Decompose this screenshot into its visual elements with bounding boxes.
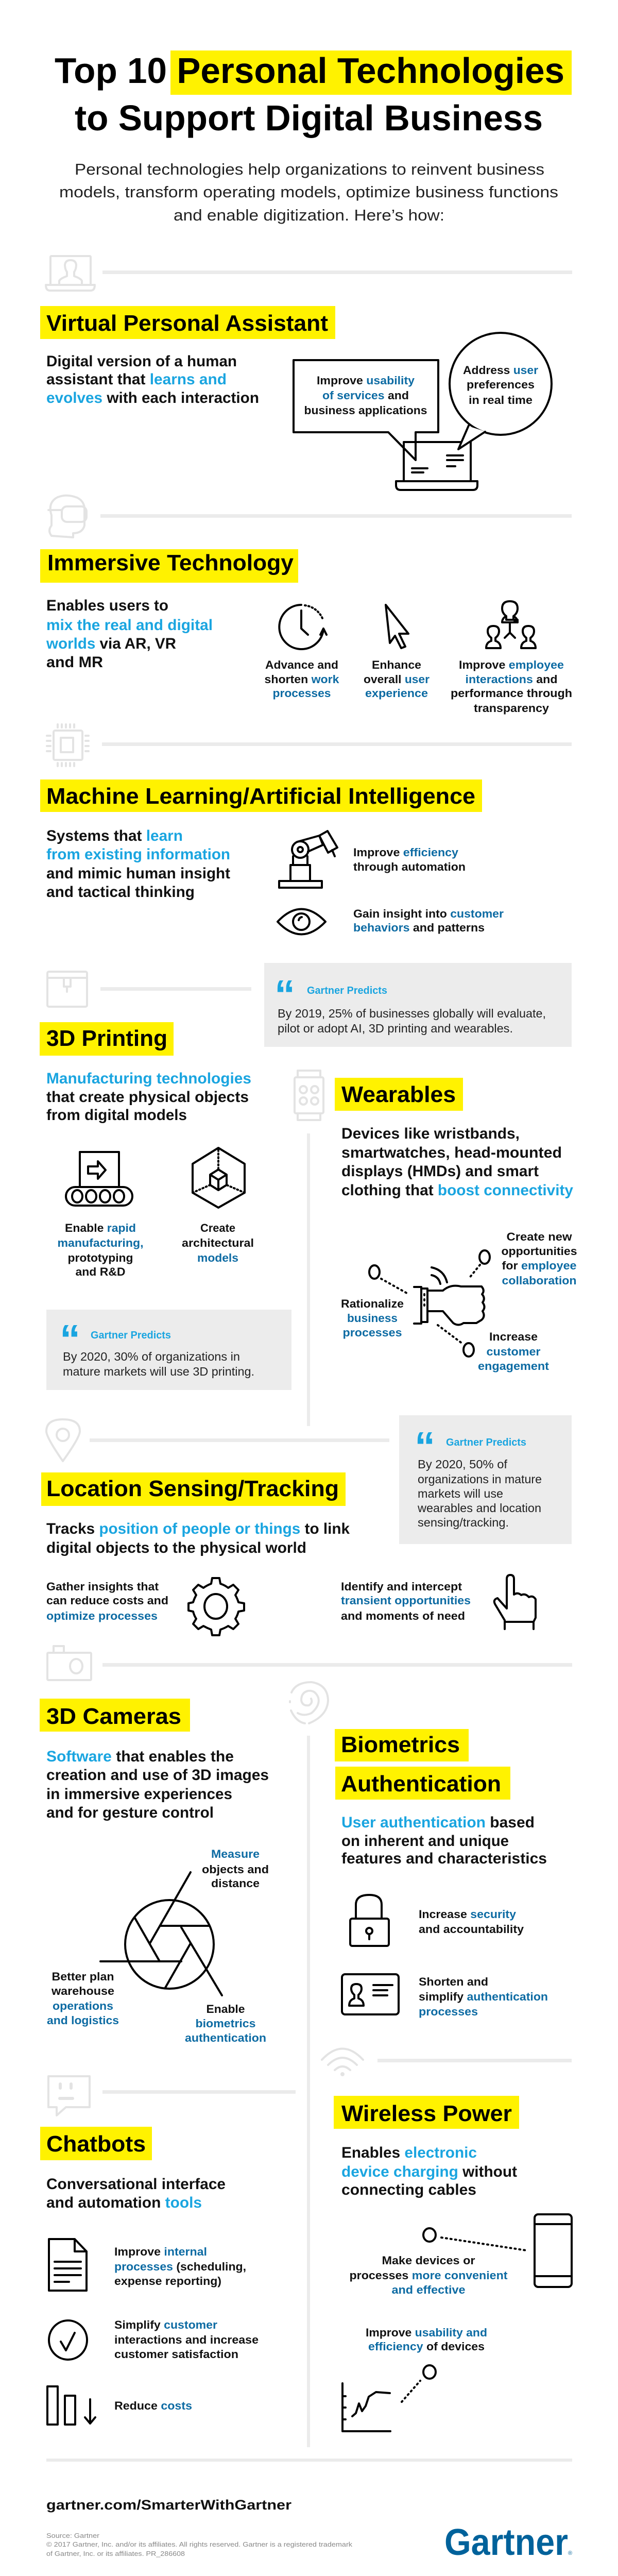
caption: user experience: Enhance xyxy=(372,658,421,671)
text: identify and intercept: and moments of need xyxy=(341,1609,465,1622)
callout: user preferences: in real time xyxy=(469,394,533,406)
caption: enable biometrics: Enable xyxy=(206,2003,245,2015)
callout: usability: Improve usability xyxy=(317,374,415,387)
caption: convenient: processes more convenient xyxy=(349,2269,508,2282)
caption: employee interactions: transparency xyxy=(474,702,550,715)
caption: customer engagement: Increase xyxy=(489,1330,538,1343)
heading: VPA: Virtual Personal Assistant xyxy=(46,311,328,336)
panel: biometrics xyxy=(335,1729,548,2018)
text: 3D cameras description: and for gesture control xyxy=(46,1804,214,1821)
text: immersive description xyxy=(46,597,213,671)
caption: employee collaboration: for employee xyxy=(502,1259,577,1272)
icon: camera xyxy=(47,1646,91,1680)
text: biometrics description: User authentication based xyxy=(341,1814,535,1831)
text: location description: Tracks position of people or things to link xyxy=(46,1520,350,1537)
heading: chatbots: Chatbots xyxy=(46,2131,146,2157)
caption: architectural models: models xyxy=(197,1251,238,1264)
text: gather insights: can reduce costs and xyxy=(46,1594,168,1607)
caption: measure objects xyxy=(202,1848,269,1890)
callout: gartner predicts 2019: “ xyxy=(274,972,295,1018)
caption: enable biometrics xyxy=(185,2003,266,2044)
text: 3D cameras description: creation and use of 3D images xyxy=(46,1767,269,1784)
caption: work processes: shorten work xyxy=(265,673,339,686)
caption: employee collaboration xyxy=(502,1230,577,1287)
caption: rapid manufacturing xyxy=(58,1222,143,1278)
caption: warehouse: warehouse xyxy=(51,1985,114,1997)
icon: cursor xyxy=(386,605,408,648)
caption: convenient: Make devices or xyxy=(382,2254,475,2267)
panel: machine learning xyxy=(40,779,504,935)
callout: gartner predicts 3D printing: mature markets will use 3D printing. xyxy=(63,1365,254,1378)
heading: ML/AI: Machine Learning/Artificial Intelligence xyxy=(46,784,475,809)
text: immersive description: worlds via AR, VR xyxy=(46,635,176,652)
icon: check circle xyxy=(49,2320,87,2360)
text: 3D printing description: Manufacturing technologies xyxy=(46,1070,251,1087)
icon: eye xyxy=(278,909,325,935)
title: Top 10 Personal Technologies xyxy=(55,50,564,91)
caption: usability xyxy=(366,2326,487,2353)
text: wireless description: device charging without xyxy=(341,2163,517,2180)
callout: gartner predicts 50%: sensing/tracking. xyxy=(418,1516,509,1529)
text: chatbots description xyxy=(46,2176,226,2211)
text: wearables description: clothing that boost connectivity xyxy=(341,1182,573,1199)
text: wearables description xyxy=(341,1125,573,1199)
text: ML description: and mimic human insight xyxy=(46,865,230,882)
callout: gartner predicts 50%: organizations in mature xyxy=(418,1472,542,1486)
heading: wearables: Wearables xyxy=(341,1082,456,1107)
heading: chatbots xyxy=(40,2127,152,2160)
text: chatbots description: Conversational interface xyxy=(46,2176,226,2193)
text: customer satisfaction: interactions and increase xyxy=(114,2333,259,2346)
text: internal processes xyxy=(114,2245,246,2287)
text: biometrics description xyxy=(341,1814,547,1867)
icon: laptop xyxy=(396,442,477,490)
caption: measure objects: distance xyxy=(211,1877,260,1890)
caption: measure objects: Measure xyxy=(211,1848,260,1860)
caption: architectural models: architectural xyxy=(182,1236,254,1249)
panel: location sensing xyxy=(41,1472,536,1635)
text: immersive description: mix the real and digital xyxy=(46,617,213,634)
caption: work processes xyxy=(265,658,339,700)
caption: user experience: overall user xyxy=(364,673,430,686)
text: customer behaviors xyxy=(353,907,504,934)
icon: location pin xyxy=(46,1419,80,1461)
heading: immersive: Immersive Technology xyxy=(47,550,294,575)
title xyxy=(55,50,572,138)
caption: rapid manufacturing: and R&D xyxy=(75,1265,126,1278)
logo: Gartner: Gartner xyxy=(444,2522,568,2563)
footer: source: © 2017 Gartner, Inc. and/or its affiliates. All rights reserved. Gartner is a registered trademark xyxy=(46,2540,353,2548)
heading: 3D printing xyxy=(40,1022,174,1056)
text: security: and accountability xyxy=(419,1923,524,1936)
heading: location: Location Sensing/Tracking xyxy=(46,1476,339,1501)
callout: usability: business applications xyxy=(304,404,427,417)
heading: biometrics xyxy=(335,1729,510,1800)
text: wireless description xyxy=(341,2144,517,2198)
text: security: Increase security xyxy=(419,1908,517,1921)
text: gather insights: optimize processes xyxy=(46,1609,158,1622)
caption: employee collaboration: collaboration xyxy=(502,1274,577,1287)
caption: work processes: processes xyxy=(273,687,331,700)
text: immersive description: Enables users to xyxy=(46,597,168,614)
text: efficiency xyxy=(353,846,466,873)
text: internal processes: expense reporting) xyxy=(114,2275,221,2287)
heading: 3D printing: 3D Printing xyxy=(46,1026,167,1051)
panel: 3D cameras xyxy=(40,1699,269,2044)
caption: rationalize: processes xyxy=(343,1326,402,1339)
caption: usability: efficiency of devices xyxy=(368,2340,485,2353)
callout: user preferences xyxy=(450,333,552,449)
caption: employee interactions: Improve employee xyxy=(459,658,564,671)
text: customer behaviors: behaviors and patterns xyxy=(353,921,485,934)
text: customer satisfaction: customer satisfaction xyxy=(114,2348,238,2361)
text: authentication processes: Shorten and xyxy=(419,1975,488,1988)
icon: dotted connector xyxy=(423,2228,526,2250)
text: internal processes: Improve internal xyxy=(114,2245,207,2258)
text: efficiency: Improve efficiency xyxy=(353,846,459,859)
icon: cube xyxy=(193,1148,245,1208)
caption: enable biometrics: biometrics xyxy=(196,2017,255,2030)
intro text: models, transform operating models, optimize business functions xyxy=(59,183,558,201)
title: to Support Digital Business xyxy=(75,98,543,138)
caption: rapid manufacturing: manufacturing, xyxy=(58,1236,143,1249)
callout: gartner predicts 3D printing xyxy=(46,1310,291,1390)
text: wearables description: displays (HMDs) and smart xyxy=(341,1163,539,1180)
caption: rationalize: business xyxy=(347,1312,398,1325)
text: security xyxy=(419,1908,524,1936)
text: internal processes: processes (scheduling, xyxy=(114,2260,246,2273)
callout: user preferences: Address user xyxy=(463,364,538,377)
caption: architectural models: Create xyxy=(200,1222,235,1234)
intro text: Personal technologies help organizations to reinvent business xyxy=(75,160,544,178)
text: location description: digital objects to the physical world xyxy=(46,1539,306,1556)
panel: wearables xyxy=(335,1078,577,1372)
text: efficiency: through automation xyxy=(353,860,466,873)
icon: smartwatch xyxy=(295,1071,323,1120)
heading: wireless power xyxy=(334,2096,519,2129)
text: biometrics description: features and characteristics xyxy=(341,1850,547,1867)
caption: employee collaboration: opportunities xyxy=(502,1245,577,1258)
text: ML description: Systems that learn xyxy=(46,827,183,844)
callout: user preferences: preferences xyxy=(467,378,535,391)
caption: user experience xyxy=(364,658,430,700)
text: wireless description: Enables electronic xyxy=(341,2144,477,2161)
text: VPA description: evolves with each interaction xyxy=(46,389,259,406)
caption: work processes: Advance and xyxy=(265,658,338,671)
text: identify and intercept: transient opportunities xyxy=(341,1594,471,1607)
caption: enable biometrics: authentication xyxy=(185,2031,266,2044)
icon: fingerprint xyxy=(290,1682,328,1723)
text: location description xyxy=(46,1520,350,1556)
callout: gartner predicts 3D printing: Gartner Predicts xyxy=(91,1330,171,1341)
callout: usability: of services and xyxy=(322,389,409,402)
text: reduce costs: Reduce costs xyxy=(114,2399,192,2412)
caption: convenient xyxy=(349,2254,508,2296)
text: biometrics description: on inherent and unique xyxy=(341,1833,509,1850)
caption: usability: Improve usability and xyxy=(366,2326,487,2339)
icon: gear xyxy=(188,1578,244,1635)
intro text xyxy=(59,160,558,224)
text: wearables description: Devices like wristbands, xyxy=(341,1125,520,1142)
heading: biometrics: Biometrics xyxy=(341,1732,460,1757)
icon: ID card xyxy=(342,1974,399,2014)
caption: warehouse: and logistics xyxy=(47,2014,119,2027)
caption: customer engagement xyxy=(478,1330,550,1372)
icon: wifi xyxy=(322,2048,363,2075)
panel: wireless power xyxy=(334,2096,572,2431)
caption: rapid manufacturing: prototyping xyxy=(68,1251,133,1264)
text: gather insights: Gather insights that xyxy=(46,1580,159,1593)
text: gather insights xyxy=(46,1580,168,1622)
caption: employee collaboration: Create new xyxy=(507,1230,572,1243)
callout: gartner predicts 50%: wearables and location xyxy=(417,1501,541,1515)
text: wireless description: connecting cables xyxy=(341,2181,476,2198)
icon: phone xyxy=(535,2214,572,2287)
callout: gartner predicts 3D printing: “ xyxy=(60,1316,80,1362)
icon: aperture xyxy=(100,1872,222,1995)
caption: employee interactions xyxy=(451,658,572,715)
text: VPA description: Digital version of a human xyxy=(46,353,237,370)
callout: gartner predicts 2019: Gartner Predicts xyxy=(307,985,387,996)
text: customer behaviors: Gain insight into customer xyxy=(353,907,504,920)
callout: gartner predicts 2019: pilot or adopt AI, 3D printing and wearables. xyxy=(278,1022,513,1035)
icon: bars down xyxy=(47,2386,95,2425)
caption: employee interactions: interactions and xyxy=(466,673,557,686)
caption: rationalize: Rationalize xyxy=(341,1297,404,1310)
icon: chip xyxy=(47,724,89,766)
heading: 3D cameras: 3D Cameras xyxy=(46,1704,181,1729)
icon: 3D printer xyxy=(47,972,87,1007)
caption: customer engagement: customer xyxy=(486,1345,541,1358)
icon: document xyxy=(49,2239,87,2291)
callout: gartner predicts 50%: Gartner Predicts xyxy=(446,1437,526,1448)
caption: convenient: and effective xyxy=(391,2283,466,2296)
callout: gartner predicts 2019 xyxy=(264,963,572,1047)
icon: robot arm xyxy=(279,831,337,888)
text: 3D cameras description: in immersive experiences xyxy=(46,1786,232,1803)
text: immersive description: and MR xyxy=(46,654,103,671)
caption: architectural models xyxy=(182,1222,254,1264)
text: identify and intercept: Identify and intercept xyxy=(341,1580,462,1593)
icon: wrist with band xyxy=(414,1267,484,1325)
heading: wearables xyxy=(335,1078,463,1111)
caption: user experience: experience xyxy=(365,687,428,700)
footer: source: of Gartner, Inc. or its affiliates. PR_286608 xyxy=(46,2550,185,2557)
text: wearables description: smartwatches, head-mounted xyxy=(341,1144,562,1161)
icon: connector dots xyxy=(369,1250,490,1357)
caption: measure objects: objects and xyxy=(202,1863,269,1876)
text: identify and intercept xyxy=(341,1580,471,1622)
panel: 3D printing xyxy=(40,1022,291,1390)
text: 3D printing description: that create physical objects xyxy=(46,1089,249,1106)
text: authentication processes: processes xyxy=(419,2005,478,2018)
icon: laptop person xyxy=(46,256,95,291)
text: VPA description xyxy=(46,353,259,406)
heading: wireless power: Wireless Power xyxy=(341,2101,512,2126)
footer: url: gartner.com/SmarterWithGartner xyxy=(46,2497,292,2513)
icon: conveyor xyxy=(66,1152,132,1206)
caption: rationalize xyxy=(341,1297,404,1339)
icon: padlock xyxy=(350,1895,389,1946)
callout: gartner predicts 3D printing: By 2020, 30% of organizations in xyxy=(63,1350,240,1363)
heading: 3D cameras xyxy=(40,1699,190,1732)
text: VPA description: assistant that learns and xyxy=(46,371,227,388)
icon: chatbot xyxy=(48,2076,90,2115)
text: ML description: and tactical thinking xyxy=(46,884,195,901)
callout: usability xyxy=(294,360,438,460)
text: ML description: from existing information xyxy=(46,846,230,863)
panel: chatbots xyxy=(40,2127,259,2425)
text: 3D printing description: from digital models xyxy=(46,1107,187,1124)
callout: gartner predicts 50% xyxy=(399,1415,572,1544)
heading: biometrics: Authentication xyxy=(341,1771,501,1797)
text: customer satisfaction xyxy=(114,2318,259,2361)
logo: Gartner: ® xyxy=(568,2550,572,2556)
text: 3D cameras description xyxy=(46,1748,269,1821)
caption: warehouse: Better plan xyxy=(52,1970,114,1983)
caption: customer engagement: engagement xyxy=(478,1360,550,1372)
icon: VR headset xyxy=(48,496,87,537)
text: chatbots description: and automation tools xyxy=(46,2194,202,2211)
icon: pointing hand xyxy=(494,1575,536,1629)
callout: gartner predicts 50%: “ xyxy=(415,1423,435,1469)
callout: gartner predicts 50%: markets will use xyxy=(418,1487,503,1500)
callout: gartner predicts 2019: By 2019, 25% of businesses globally will evaluate, xyxy=(278,1007,546,1020)
text: authentication processes: simplify authentication xyxy=(419,1990,548,2003)
intro text: and enable digitization. Here’s how: xyxy=(174,206,444,224)
icon: people xyxy=(486,601,536,648)
caption: employee interactions: performance through xyxy=(451,687,572,700)
footer: source: Source: Gartner xyxy=(46,2532,100,2539)
caption: warehouse: operations xyxy=(53,1999,113,2012)
text: authentication processes xyxy=(419,1975,548,2018)
callout: gartner predicts 50%: By 2020, 50% of xyxy=(418,1458,508,1471)
icon: growth chart xyxy=(342,2365,436,2431)
caption: warehouse xyxy=(47,1970,119,2027)
text: 3D cameras description: Software that enables the xyxy=(46,1748,234,1765)
caption: rapid manufacturing: Enable rapid xyxy=(65,1222,136,1234)
footer: source xyxy=(46,2532,353,2557)
text: ML description xyxy=(46,827,230,901)
text: 3D printing description xyxy=(46,1070,251,1124)
icon: clock xyxy=(279,605,327,649)
panel: virtual personal assistant xyxy=(40,306,552,490)
panel: immersive technology xyxy=(40,549,572,715)
text: customer satisfaction: Simplify customer xyxy=(114,2318,217,2331)
